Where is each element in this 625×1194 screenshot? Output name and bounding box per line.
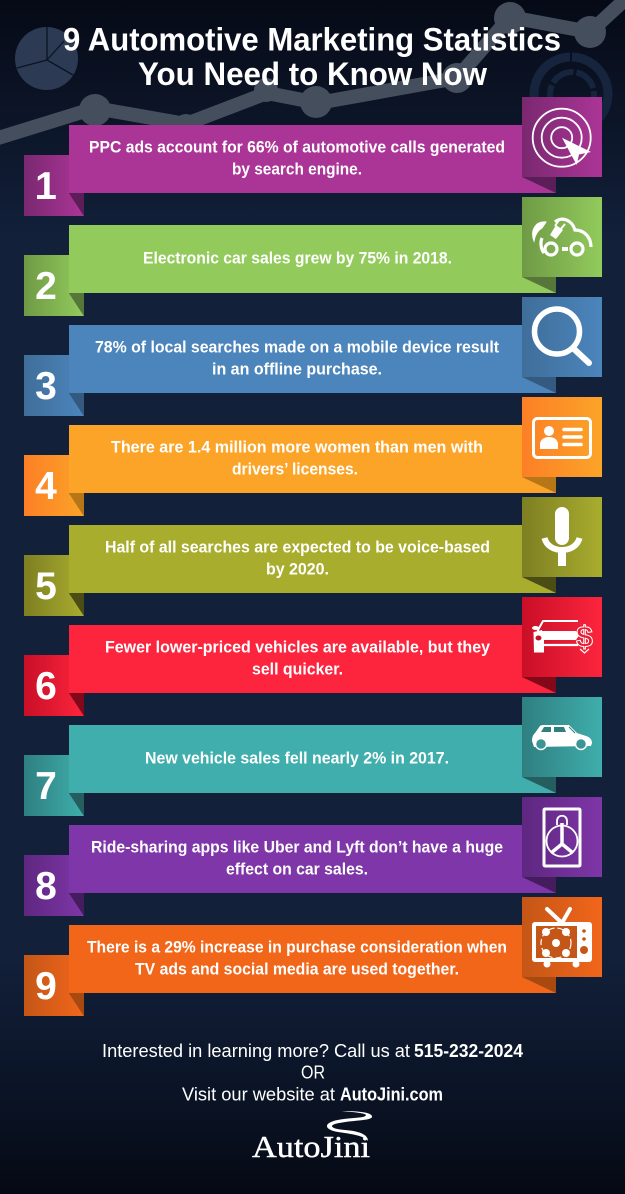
- icon: microphone: [544, 507, 580, 566]
- title: 9 Automotive Marketing Statistics: [63, 22, 561, 58]
- icon: side view car: [532, 725, 592, 750]
- panel: stat 8: [24, 797, 602, 916]
- call to action: [102, 1041, 523, 1104]
- call to action: AutoJini.com: [340, 1084, 443, 1104]
- call to action: 515-232-2024: [414, 1041, 523, 1061]
- panel: stat 1: by search engine.: [232, 160, 362, 178]
- call to action: OR: [301, 1062, 325, 1082]
- panel: stat 2: [24, 197, 602, 316]
- panel: stat 3: [24, 297, 602, 416]
- panel: stat 6: Fewer lower-priced vehicles are available, but they: [105, 638, 491, 656]
- panel: stat 4: drivers’ licenses.: [232, 460, 358, 478]
- panel: stat 2: Electronic car sales grew by 75% in 2018.: [143, 250, 452, 268]
- panel: stat 4: There are 1.4 million more women than men with: [111, 438, 483, 456]
- panel: stat 8: effect on car sales.: [226, 860, 368, 878]
- panel: stat 9: TV ads and social media are used together.: [135, 960, 459, 978]
- panel: stat 7: 7: [35, 765, 57, 808]
- panel: stat 8: 8: [35, 865, 57, 908]
- panel: stat 5: [24, 497, 602, 616]
- icon: television with social icons: [532, 909, 592, 968]
- icon: target with cursor: [533, 109, 591, 167]
- logo: AutoJini: AutoJini: [252, 1129, 370, 1164]
- panel: stat 3: in an offline purchase.: [212, 360, 382, 378]
- title: You Need to Know Now: [138, 56, 487, 92]
- panel: stat 6: [24, 597, 602, 716]
- icon: tablet with ride-share logo: [544, 809, 580, 866]
- panel: stat 5: 5: [35, 565, 57, 608]
- title: [63, 22, 561, 92]
- background line chart: [0, 0, 625, 139]
- panel: stat 5: by 2020.: [266, 560, 329, 578]
- panel: stat 7: [24, 697, 602, 816]
- panel: stat 2: 2: [35, 265, 57, 308]
- panel: stat 1: PPC ads account for 66% of automotive calls generated: [89, 138, 505, 156]
- background pie chart: [15, 27, 78, 90]
- call to action: Interested in learning more? Call us at: [102, 1041, 410, 1061]
- icon: magnifying glass: [534, 309, 589, 363]
- call to action: Visit our website at: [182, 1084, 335, 1104]
- panel: stat 1: [24, 97, 602, 216]
- background donut chart: [534, 57, 608, 131]
- icon: car with dollar sign: $: [576, 621, 593, 654]
- panel: stat 9: There is a 29% increase in purchase consideration when: [87, 938, 507, 956]
- icon: car with dollar sign: [532, 621, 593, 654]
- panel: stat 5: Half of all searches are expected to be voice-based: [105, 538, 490, 556]
- panel: stat 3: 3: [35, 365, 57, 408]
- panel: stat 7: New vehicle sales fell nearly 2% in 2017.: [145, 750, 449, 768]
- panel: stat 9: 9: [35, 965, 57, 1008]
- panel: stat 9: [24, 897, 602, 1016]
- logo: AutoJini: [252, 1111, 372, 1164]
- panel: stat 6: 6: [35, 665, 57, 708]
- panel: stat 4: [24, 397, 602, 516]
- panel: stat 1: 1: [35, 165, 57, 208]
- icon: electric car: [533, 219, 591, 255]
- panel: stat 3: 78% of local searches made on a mobile device result: [95, 338, 499, 356]
- panel: stat 4: 4: [35, 465, 57, 508]
- icon: license card: [534, 418, 590, 458]
- panel: stat 8: Ride-sharing apps like Uber and Lyft don’t have a huge: [91, 838, 503, 856]
- panel: stat 6: sell quicker.: [252, 660, 343, 678]
